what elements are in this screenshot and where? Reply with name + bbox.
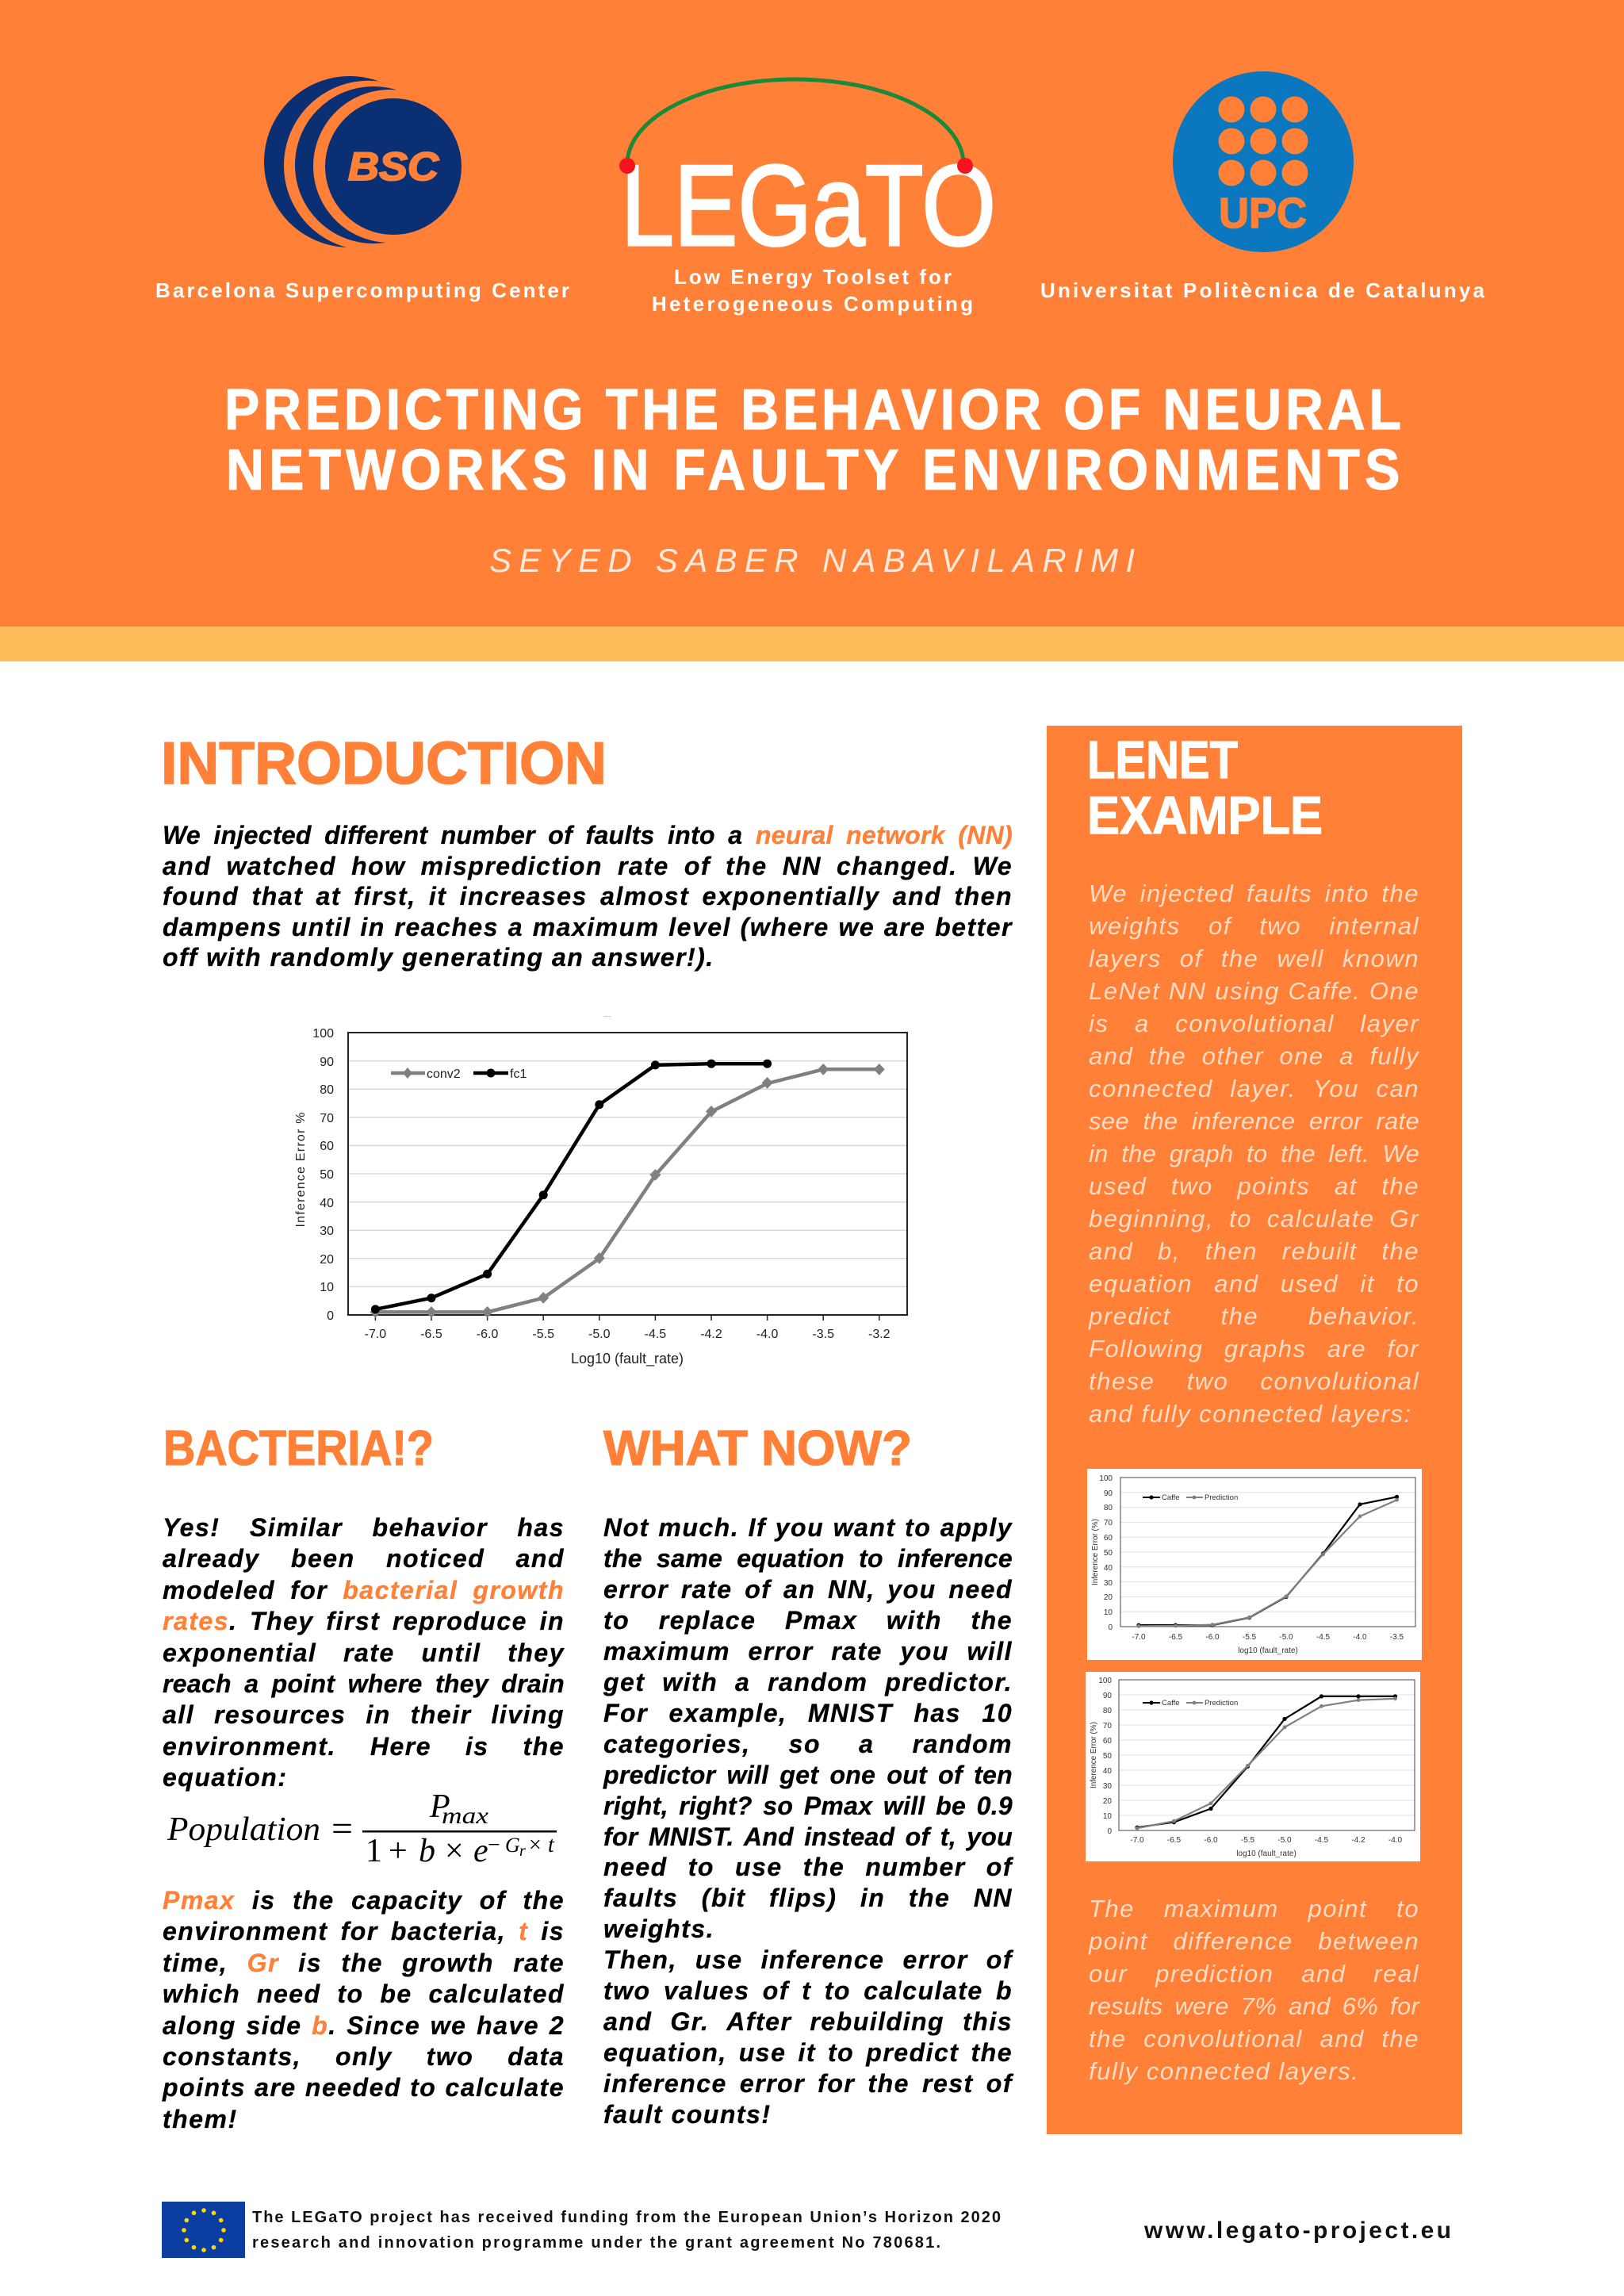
text: bacteria explanation: [162, 1886, 565, 2133]
line chart: inference error vs fault rate: -6.5: [420, 1328, 442, 1341]
line chart: inference error vs fault rate: -5.0: [588, 1328, 611, 1341]
footer: funding statement: The LEGaTO project has received funding from the European Union’s Horizon 2020: [252, 2209, 1001, 2226]
line chart: inference error vs fault rate: 80: [320, 1083, 334, 1097]
small chart: fully connected layer prediction: -4.5: [1315, 1836, 1329, 1845]
small chart: fully connected layer prediction: 60: [1103, 1737, 1112, 1746]
text: LeNet description: used two points at the: [1089, 1172, 1419, 1200]
text: LeNet description: these two convolutional: [1089, 1367, 1419, 1395]
equation: population growth: =: [331, 1809, 353, 1848]
line chart: inference error vs fault rate: -4.0: [756, 1328, 778, 1341]
small chart: fully connected layer prediction: -6.5: [1167, 1836, 1182, 1845]
small chart: fully connected layer prediction: 30: [1103, 1782, 1112, 1791]
small chart: fully connected layer prediction: log10 (fault_rate): [1236, 1849, 1297, 1858]
small chart: convolutional layer prediction: [1087, 1469, 1422, 1660]
small chart: convolutional layer prediction: 40: [1104, 1564, 1113, 1573]
text: LeNet description: connected layer. You can: [1089, 1075, 1419, 1102]
text: LeNet description: and the other one a fully: [1089, 1042, 1419, 1070]
line chart: inference error vs fault rate: -4.5: [645, 1328, 666, 1341]
line chart: inference error vs fault rate: Inference Error %: [294, 1112, 308, 1228]
small chart: convolutional layer prediction: 100: [1099, 1474, 1113, 1483]
icon: UPC logo: UPC: [1219, 190, 1307, 237]
caption: Low Energy Toolset: Heterogeneous Computing: [652, 292, 973, 316]
small chart: convolutional layer prediction: log10 (fault_rate): [1238, 1646, 1298, 1655]
text: LeNet description: and b, then rebuilt the: [1089, 1237, 1419, 1265]
small chart: convolutional layer prediction: Prediction: [1205, 1493, 1238, 1502]
text: what now paragraph: error rate of an NN, you need: [603, 1575, 1013, 1604]
text: bacteria explanation: time, Gr is the growth rate: [163, 1949, 565, 1977]
small chart: convolutional layer prediction: -6.5: [1169, 1633, 1183, 1642]
small chart: convolutional layer prediction: -3.5: [1390, 1633, 1404, 1642]
text: bacteria paragraph: rates. They first reproduce in: [163, 1607, 565, 1635]
text: LeNet description: layers of the well known: [1089, 945, 1419, 972]
text: LeNet description: beginning, to calculate Gr: [1089, 1205, 1419, 1232]
equation: population growth: max: [442, 1803, 489, 1829]
equation: population growth: 1: [366, 1833, 382, 1869]
text: what now paragraph: [603, 1513, 1013, 2129]
equation: population growth: ×: [445, 1833, 464, 1869]
text: LeNet description: predict the behavior.: [1089, 1302, 1419, 1330]
text: bacteria explanation: which need to be calculated: [163, 1980, 565, 2008]
small chart: convolutional layer prediction: 30: [1104, 1579, 1113, 1588]
text: bacteria explanation: points are needed to calculate: [163, 2073, 565, 2102]
line chart: inference error vs fault rate: conv2: [427, 1068, 461, 1081]
text: LeNet results: The maximum point to: [1089, 1895, 1419, 1922]
text: bacteria paragraph: [163, 1513, 565, 1792]
text: LeNet description: and fully connected layers:: [1089, 1400, 1412, 1428]
line chart: inference error vs fault rate: 70: [320, 1112, 334, 1125]
small chart: fully connected layer prediction: -4.0: [1388, 1836, 1403, 1845]
heading: LeNet example: EXAMPLE: [1087, 786, 1323, 845]
equation: population growth: ×: [529, 1833, 542, 1857]
small chart: convolutional layer prediction: 10: [1104, 1608, 1113, 1617]
small chart: fully connected layer prediction: 100: [1098, 1677, 1112, 1685]
text: what now paragraph: faults (bit flips) in the NN: [603, 1884, 1013, 1912]
small chart: convolutional layer prediction: 0: [1108, 1623, 1113, 1632]
small chart: fully connected layer prediction: -5.0: [1277, 1836, 1292, 1845]
text: bacteria paragraph: all resources in their living: [163, 1700, 565, 1729]
equation: population growth: P: [429, 1788, 450, 1825]
text: bacteria paragraph: Yes! Similar behavior has: [163, 1513, 565, 1542]
small chart: fully connected layer prediction: -4.2: [1351, 1836, 1365, 1845]
small chart: fully connected layer prediction: 80: [1103, 1707, 1112, 1715]
equation: population growth: G: [505, 1834, 520, 1857]
small chart: fully connected layer prediction: Inference Error (%): [1090, 1722, 1098, 1788]
line chart: inference error vs fault rate: -7.0: [365, 1328, 386, 1341]
header accent band: [0, 627, 1624, 661]
text: what now paragraph: get with a random predictor.: [603, 1668, 1013, 1696]
line chart: inference error vs fault rate: 20: [320, 1253, 334, 1267]
line chart: inference error vs fault rate: fc1: [510, 1068, 527, 1081]
heading: LeNet example: [1087, 730, 1323, 845]
icon: EU flag: [162, 2202, 245, 2258]
small chart: convolutional layer prediction: -7.0: [1132, 1633, 1146, 1642]
line chart: inference error vs fault rate: 0: [327, 1309, 334, 1323]
text: LeNet results: [1088, 1895, 1420, 2085]
text: what now paragraph: fault counts!: [603, 2100, 771, 2129]
equation: population growth: e: [473, 1833, 488, 1869]
text: LeNet results: point difference between: [1089, 1927, 1419, 1955]
header background: [0, 0, 1624, 627]
text: bacteria explanation: along side b. Since we have 2: [163, 2011, 565, 2040]
small chart: convolutional layer prediction: -5.5: [1243, 1633, 1257, 1642]
line chart: inference error vs fault rate: 40: [320, 1197, 334, 1210]
text: LeNet results: our prediction and real: [1089, 1960, 1419, 1987]
icon: LEGaTO logo: LEGaTO: [621, 141, 996, 270]
text: bacteria paragraph: reach a point where they drain: [163, 1669, 565, 1698]
small chart: fully connected layer prediction: 50: [1103, 1752, 1112, 1761]
text: LeNet description: LeNet NN using Caffe. One: [1089, 977, 1419, 1005]
text: what now paragraph: categories, so a random: [603, 1730, 1013, 1758]
small chart: convolutional layer prediction: Inference Error (%): [1091, 1519, 1100, 1585]
line chart: inference error vs fault rate: -5.5: [532, 1328, 554, 1341]
text: bacteria paragraph: equation:: [163, 1763, 287, 1792]
text: LeNet description: see the inference error rate: [1089, 1107, 1419, 1135]
text: introduction paragraph: We injected different number of faults into a neural network (NN): [163, 821, 1013, 849]
equation: population growth: −: [488, 1833, 500, 1857]
footer: funding statement: [252, 2209, 1001, 2252]
text: LeNet description: in the graph to the left. We: [1089, 1140, 1419, 1167]
text: LeNet description: We injected faults into the: [1089, 880, 1419, 907]
caption: Low Energy Toolset: [652, 265, 973, 316]
text: what now paragraph: weights.: [603, 1915, 714, 1943]
text: introduction paragraph: and watched how misprediction rate of the NN changed. We: [163, 852, 1013, 880]
small chart: fully connected layer prediction: 20: [1103, 1797, 1112, 1806]
small chart: fully connected layer prediction: -5.5: [1241, 1836, 1255, 1845]
caption: Universitat Politecnica de Catalunya: Universitat Politècnica de Catalunya: [1040, 278, 1485, 302]
line chart: inference error vs fault rate: 50: [320, 1168, 334, 1182]
small chart: convolutional layer prediction: 90: [1104, 1489, 1113, 1498]
small chart: fully connected layer prediction: 40: [1103, 1767, 1112, 1776]
small chart: convolutional layer prediction: -4.0: [1353, 1633, 1367, 1642]
equation: population growth: +: [389, 1833, 408, 1869]
text: what now paragraph: right, right? so Pmax will be 0.9: [603, 1792, 1013, 1820]
small chart: fully connected layer prediction: -7.0: [1130, 1836, 1144, 1845]
text: bacteria explanation: them!: [163, 2105, 238, 2133]
panel: LeNet example background: [1047, 726, 1462, 2134]
title: [224, 377, 1401, 502]
text: LeNet description: [1088, 880, 1419, 1428]
icon: UPC logo: [1173, 71, 1354, 252]
small chart: convolutional layer prediction: -6.0: [1205, 1633, 1220, 1642]
text: LeNet description: Following graphs are for: [1089, 1335, 1419, 1363]
small chart: convolutional layer prediction: 70: [1104, 1519, 1113, 1527]
line chart: inference error vs fault rate: 10: [320, 1281, 334, 1294]
small chart: fully connected layer prediction: [1086, 1672, 1420, 1861]
title: NETWORKS IN FAULTY ENVIRONMENTS: [226, 437, 1400, 502]
text: LeNet results: fully connected layers.: [1089, 2057, 1359, 2085]
text: what now paragraph: for MNIST. And instead of t, you: [603, 1823, 1013, 1851]
text: LeNet description: equation and used it to: [1089, 1270, 1419, 1297]
small chart: fully connected layer prediction: 10: [1103, 1812, 1112, 1821]
small chart: convolutional layer prediction: Caffe: [1162, 1493, 1180, 1502]
small chart: convolutional layer prediction: -4.5: [1316, 1633, 1331, 1642]
text: what now paragraph: need to use the number of: [603, 1853, 1013, 1881]
text: introduction paragraph: off with randomly generating an answer!).: [163, 943, 714, 972]
line chart: inference error vs fault rate: 100: [312, 1027, 334, 1041]
line chart: inference error vs fault rate: 90: [320, 1056, 334, 1069]
equation: population growth: r: [519, 1842, 526, 1860]
text: bacteria paragraph: environment. Here is the: [163, 1732, 565, 1761]
small chart: fully connected layer prediction: Prediction: [1205, 1699, 1238, 1708]
text: what now paragraph: to replace Pmax with the: [603, 1606, 1013, 1635]
heading: bacteria: BACTERIA!?: [163, 1421, 434, 1476]
text: introduction paragraph: found that at first, it increases almost exponentially and then: [163, 882, 1013, 910]
small chart: fully connected layer prediction: 90: [1103, 1692, 1112, 1700]
text: bacteria paragraph: already been noticed and: [163, 1544, 565, 1573]
small chart: fully connected layer prediction: 0: [1107, 1827, 1112, 1836]
text: bacteria explanation: constants, only two data: [163, 2042, 565, 2071]
line chart: inference error vs fault rate: Log10 (fault_rate): [571, 1351, 684, 1367]
equation: population growth: b: [419, 1833, 435, 1869]
text: what now paragraph: maximum error rate you will: [603, 1637, 1013, 1665]
heading: what now: WHAT NOW?: [603, 1421, 912, 1476]
author: SEYED SABER NABAVILARIMI: [489, 542, 1135, 579]
text: what now paragraph: and Gr. After rebuilding this: [603, 2007, 1013, 2036]
line chart: inference error vs fault rate: -3.2: [868, 1328, 891, 1341]
line chart: inference error vs fault rate: -6.0: [477, 1328, 498, 1341]
text: bacteria explanation: Pmax is the capacity of the: [163, 1886, 565, 1915]
text: LeNet description: weights of two internal: [1089, 912, 1419, 940]
small chart: fully connected layer prediction: Caffe: [1162, 1699, 1180, 1708]
text: introduction paragraph: [163, 821, 1013, 972]
small chart: convolutional layer prediction: 20: [1104, 1593, 1113, 1602]
text: what now paragraph: two values of t to calculate b: [603, 1976, 1013, 2005]
equation: population growth: [167, 1788, 557, 1869]
text: LeNet results: results were 7% and 6% for: [1089, 1992, 1419, 2020]
small chart: convolutional layer prediction: -5.0: [1279, 1633, 1293, 1642]
text: what now paragraph: equation, use it to predict the: [603, 2038, 1013, 2067]
line chart: inference error vs fault rate: 30: [320, 1225, 334, 1238]
small chart: fully connected layer prediction: -6.0: [1204, 1836, 1218, 1845]
line chart: inference error vs fault rate: 60: [320, 1140, 334, 1153]
small chart: convolutional layer prediction: 50: [1104, 1549, 1113, 1558]
caption: Low Energy Toolset: Low Energy Toolset for: [674, 265, 952, 289]
text: what now paragraph: Not much. If you want to apply: [603, 1513, 1013, 1542]
text: bacteria paragraph: modeled for bacterial growth: [163, 1576, 565, 1604]
footer: funding statement: research and innovation programme under the grant agreement No 780681.: [252, 2234, 940, 2252]
text: what now paragraph: inference error for the rest of: [603, 2069, 1013, 2098]
text: bacteria paragraph: exponential rate until they: [163, 1639, 565, 1667]
icon: LEGaTO logo: [619, 79, 996, 270]
icon: BSC logo: [264, 76, 466, 251]
line chart: inference error vs fault rate: -3.5: [812, 1328, 834, 1341]
text: what now paragraph: predictor will get one out of ten: [603, 1761, 1013, 1789]
line chart: inference error vs fault rate: [294, 1016, 907, 1367]
text: LeNet results: the convolutional and the: [1089, 2025, 1419, 2053]
equation: population growth: t: [548, 1833, 555, 1857]
line chart: inference error vs fault rate: -4.2: [700, 1328, 722, 1341]
text: what now paragraph: Then, use inference error of: [603, 1945, 1013, 1974]
small chart: convolutional layer prediction: 80: [1104, 1504, 1113, 1512]
text: bacteria explanation: environment for bacteria, t is: [163, 1917, 565, 1945]
caption: Barcelona Supercomputing Center: Barcelona Supercomputing Center: [155, 278, 569, 302]
icon: BSC logo: BSC: [348, 144, 439, 189]
small chart: convolutional layer prediction: 60: [1104, 1534, 1113, 1543]
heading: introduction: INTRODUCTION: [161, 730, 607, 796]
text: what now paragraph: For example, MNIST has 10: [603, 1699, 1013, 1727]
text: LeNet description: is a convolutional layer: [1089, 1010, 1419, 1037]
text: introduction paragraph: dampens until in reaches a maximum level (where we are better: [163, 913, 1013, 941]
equation: population growth: Population: [167, 1811, 320, 1848]
footer: website: www.legato-project.eu: [1143, 2217, 1451, 2244]
heading: LeNet example: LENET: [1087, 730, 1238, 790]
text: what now paragraph: the same equation to inference: [603, 1544, 1013, 1573]
small chart: fully connected layer prediction: 70: [1103, 1722, 1112, 1731]
title: PREDICTING THE BEHAVIOR OF NEURAL: [224, 377, 1401, 442]
